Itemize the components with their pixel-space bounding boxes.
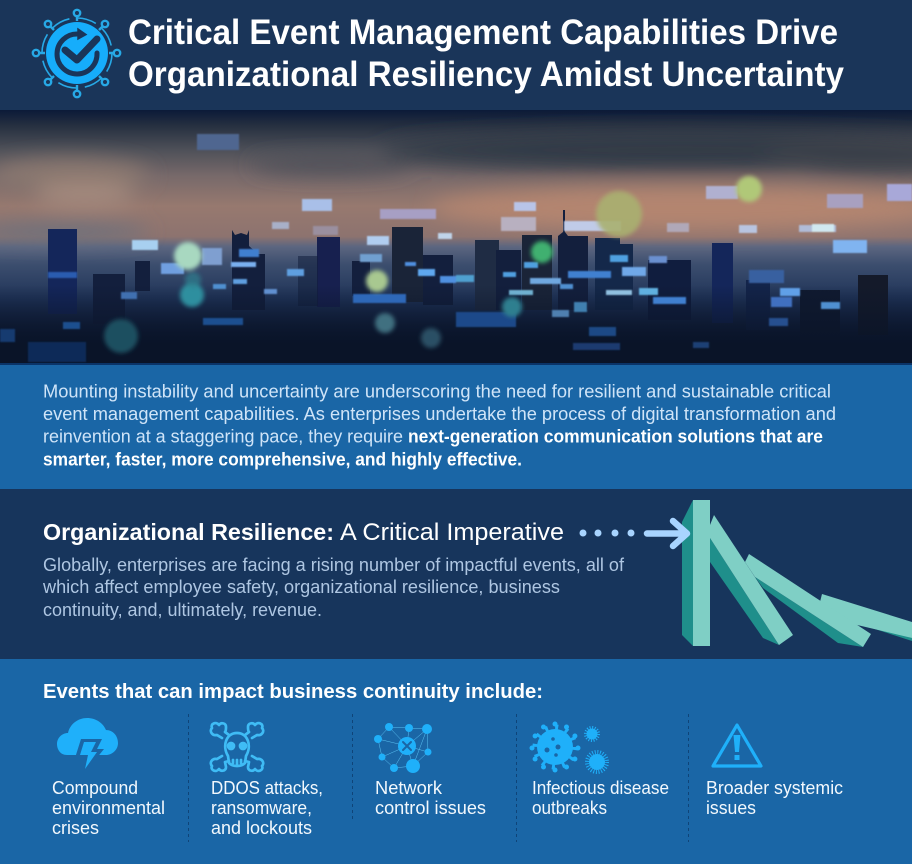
arrow: dotted pointer: [580, 521, 687, 546]
title: [128, 13, 844, 94]
label: environmental: [52, 798, 165, 818]
icon: broken network: [374, 723, 432, 773]
icon: virus particles: [530, 722, 607, 772]
label: [52, 778, 165, 838]
bokeh lights: [104, 176, 762, 353]
label: control issues: [375, 798, 486, 818]
icon: storm cloud: [57, 718, 118, 775]
icon: skull and crossbones: [211, 723, 263, 771]
label: Infectious disease: [532, 778, 669, 798]
heading: Events that can impact business continuity include:: [43, 680, 543, 703]
panel: intro: [0, 363, 912, 489]
label: DDOS attacks,: [211, 778, 323, 798]
event: infectious disease: [530, 722, 669, 818]
text block: resilience body: continuity, and, ultimately, revenue.: [43, 600, 322, 620]
text block: intro copy: Mounting instability and uncertainty are underscoring the need for resilient and sustainable critical: [43, 382, 831, 402]
text block: intro copy: next-generation communication solutions that are: [408, 426, 823, 446]
label: and lockouts: [211, 818, 312, 838]
heading: [43, 519, 564, 546]
event: ddos attacks: [211, 723, 323, 838]
label: [706, 778, 843, 818]
label: crises: [52, 818, 99, 838]
label: ransomware,: [211, 798, 312, 818]
text block: intro copy: reinvention at a staggering pace, they require: [43, 426, 403, 446]
label: [375, 778, 486, 818]
panel: organizational resilience: [0, 489, 912, 659]
event: network control issues: [374, 723, 486, 818]
title: Organizational Resiliency Amidst Uncertainty: [128, 55, 844, 94]
label: outbreaks: [532, 798, 607, 818]
glowing data blocks: [0, 134, 912, 362]
event: compound environmental crises: [52, 718, 165, 838]
icon: warning triangle: [713, 725, 761, 766]
text block: intro copy: smarter, faster, more comprehensive, and highly effective.: [43, 450, 522, 470]
label: [532, 778, 669, 818]
label: Broader systemic: [706, 778, 843, 798]
label: Compound: [52, 778, 138, 798]
label: issues: [706, 798, 756, 818]
panel: business continuity events: [0, 659, 912, 864]
text block: resilience body: which affect employee safety, organizational resilience, business: [42, 577, 560, 597]
panel: header: [0, 0, 912, 110]
icon: falling dominoes: [682, 500, 912, 647]
text block: resilience body: [42, 555, 625, 620]
heading: A Critical Imperative: [340, 519, 564, 546]
panel: hero city skyline image: [0, 110, 912, 363]
label: [211, 778, 323, 838]
label: Network: [375, 778, 443, 798]
text block: intro copy: event management capabilities. As enterprises undertake the process of digital transformation and: [43, 404, 836, 424]
icon: resilience check badge: [33, 10, 120, 97]
text block: intro copy: [43, 382, 836, 470]
text block: resilience body: Globally, enterprises are facing a rising number of impactful events, all of: [43, 555, 625, 575]
heading: Organizational Resilience:: [43, 519, 334, 545]
event: broader systemic issues: [706, 725, 843, 818]
title: Critical Event Management Capabilities Drive: [128, 13, 838, 52]
buildings: [48, 210, 888, 324]
clouds: [0, 130, 912, 240]
